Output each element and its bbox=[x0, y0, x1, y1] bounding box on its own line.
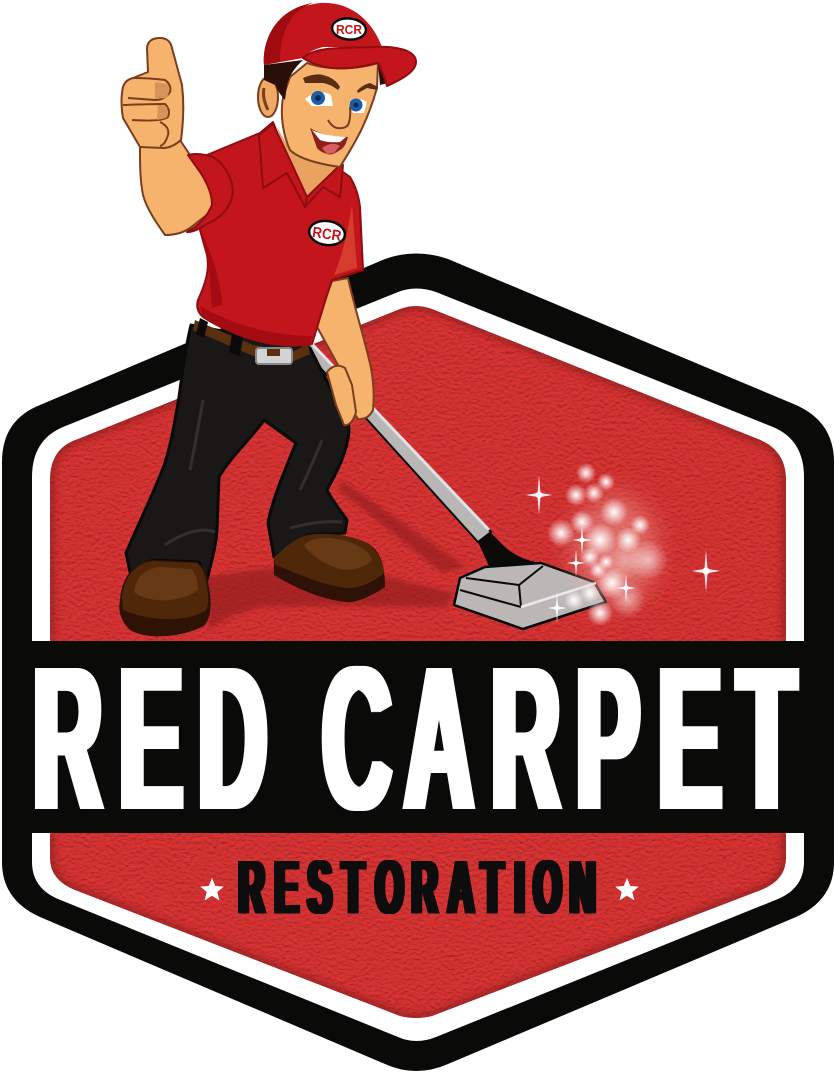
mouth bbox=[310, 128, 348, 154]
neck bbox=[277, 127, 337, 198]
cleaning wand bbox=[306, 342, 606, 629]
hexagon badge background bbox=[2, 254, 834, 1071]
raised arm bbox=[140, 140, 213, 235]
black hexagon frame bbox=[2, 254, 834, 1071]
decorative stars bbox=[200, 878, 639, 900]
character: carpet cleaner mascot bbox=[119, 3, 416, 636]
wand nozzle neck bbox=[478, 533, 541, 573]
head bbox=[258, 58, 402, 167]
face bbox=[282, 63, 378, 167]
cap badge: RCR bbox=[336, 22, 363, 37]
hair bbox=[264, 58, 402, 100]
red polo shirt bbox=[197, 122, 363, 346]
red carpet upper panel bbox=[40, 295, 800, 645]
nose bbox=[328, 107, 350, 128]
thumbs up hand bbox=[122, 38, 183, 148]
right boot bbox=[274, 534, 385, 602]
subtitle: RESTORATION: RESTORATION bbox=[239, 844, 596, 930]
title: RED CARPET: RED CARPET bbox=[33, 623, 796, 853]
belt and buckle bbox=[193, 318, 310, 364]
shirt collar bbox=[259, 124, 343, 207]
shirt sleeve bbox=[187, 154, 233, 232]
white hexagon inner ring bbox=[32, 288, 804, 1041]
right eye bbox=[349, 98, 367, 113]
pants bbox=[126, 325, 349, 580]
sparkles bbox=[526, 463, 720, 626]
red carpet lower panel bbox=[40, 830, 800, 1025]
icon: right star bbox=[615, 878, 639, 900]
shirt badge bbox=[308, 219, 346, 247]
eyebrows bbox=[303, 74, 378, 93]
ear bbox=[258, 77, 278, 117]
black title band bbox=[2, 641, 834, 833]
floor shadows bbox=[205, 480, 466, 630]
cap badge bbox=[331, 17, 367, 41]
hand fingers on wand bbox=[327, 366, 356, 425]
shirt badge: RCR bbox=[311, 224, 342, 245]
carpet cleaning head bbox=[454, 563, 606, 629]
shirt shading bbox=[200, 235, 312, 346]
left boot bbox=[119, 560, 211, 636]
red cap bbox=[264, 3, 416, 86]
lower arm bbox=[316, 278, 374, 419]
icon: left star bbox=[200, 878, 224, 900]
left eye bbox=[305, 91, 333, 106]
shirt right side highlight bbox=[334, 205, 357, 275]
